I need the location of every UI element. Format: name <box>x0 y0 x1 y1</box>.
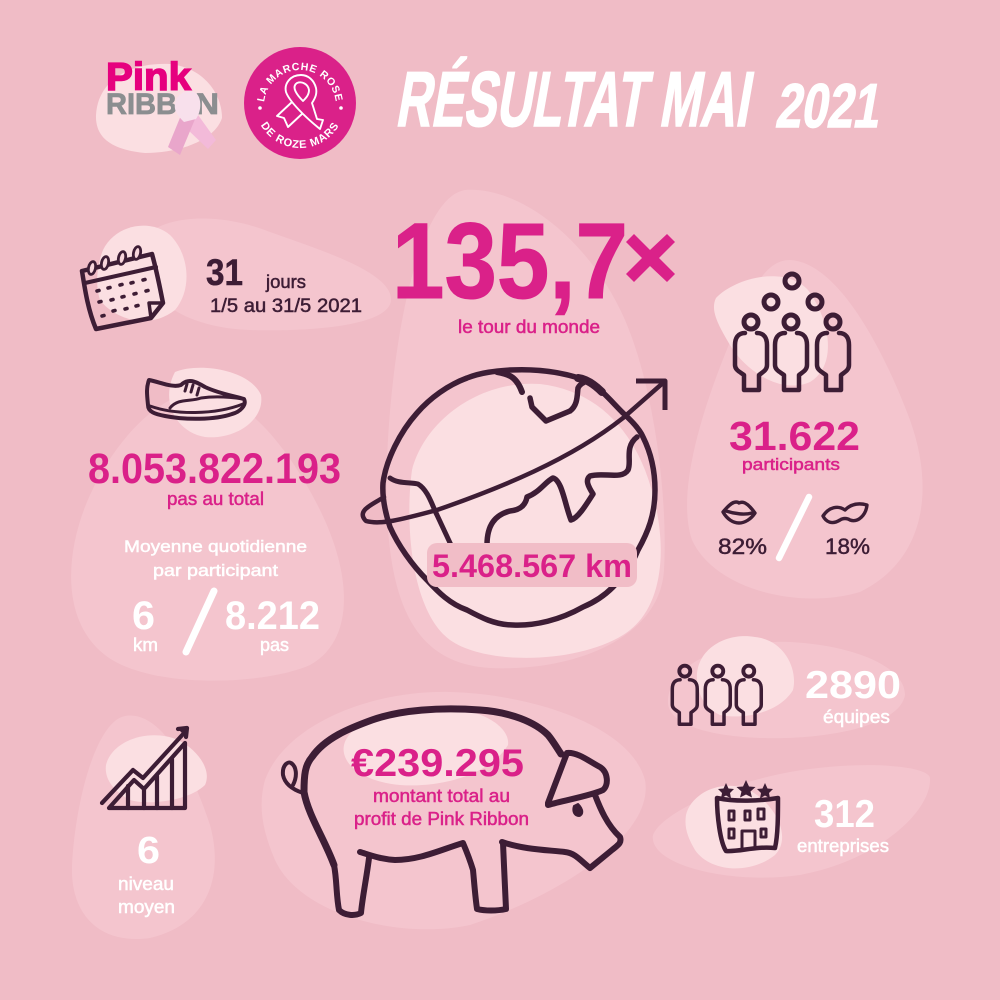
stat: amount raised: profit de Pink Ribbon <box>354 809 529 829</box>
stat: level <box>118 830 175 917</box>
text: 31 jours <box>206 252 362 317</box>
icon: calendar <box>82 246 163 329</box>
background blobs <box>71 64 930 939</box>
logo: La Marche Rose: DE ROZE MARS <box>260 121 338 148</box>
icon: teams <box>672 666 761 724</box>
logo: Pink Ribbon: RIBB <box>106 88 177 121</box>
stat: amount raised <box>351 742 529 829</box>
icon: moustache <box>823 504 867 523</box>
stat: gender split: 18% <box>825 534 870 559</box>
stat: daily average <box>124 537 320 655</box>
stat: teams <box>805 664 901 727</box>
stat: daily average: Moyenne quotidienne <box>124 537 307 556</box>
stat: teams: équipes <box>823 707 890 727</box>
stat: daily average: 8.212 <box>225 594 320 638</box>
stat: daily average: pas <box>260 635 289 655</box>
icon: pig <box>283 709 621 915</box>
stat: amount raised: montant total au <box>373 786 510 806</box>
stat: amount raised: €239.295 <box>351 742 524 785</box>
stat: daily average: 6 <box>132 594 155 638</box>
icon: company building <box>717 780 778 851</box>
text: 31 jours: 31 <box>206 252 243 293</box>
stat: level: moyen <box>118 897 175 917</box>
stat: 135,7x: 135,7 <box>392 200 628 321</box>
icon: shoe <box>147 380 245 419</box>
icon: globe with arrow <box>363 370 665 625</box>
logo: Pink Ribbon: N <box>195 88 219 121</box>
stat: level: niveau <box>118 874 174 894</box>
title: RÉSULTAT MAI <box>392 56 760 143</box>
icon: rising chart <box>102 728 187 808</box>
stat: total steps: pas au total <box>167 489 264 509</box>
stat: daily average: par participant <box>153 561 278 580</box>
logo: La Marche Rose <box>244 47 356 159</box>
stat: companies: entreprises <box>797 836 889 856</box>
icon: lips <box>723 502 755 523</box>
stat: teams: 2890 <box>805 664 901 707</box>
title: 2021 <box>772 71 887 141</box>
text: 31 jours: 1/5 au 31/5 2021 <box>210 296 362 317</box>
stat: gender split <box>718 497 870 559</box>
logo: Pink Ribbon: Pink <box>106 56 191 99</box>
logo: La Marche Rose: LA MARCHE ROSE <box>257 62 343 102</box>
icon: participants <box>735 274 849 390</box>
stat: gender split: 82% <box>718 534 767 559</box>
stat: total steps: 8.053.822.193 <box>88 445 341 493</box>
stat: companies: 312 <box>814 793 875 836</box>
stat: participants: 31.622 <box>729 413 860 459</box>
stat: companies <box>797 793 889 856</box>
text: 31 jours: jours <box>265 272 306 292</box>
label: total distance: 5.468.567 km <box>432 548 632 584</box>
stat: level: 6 <box>137 830 160 872</box>
stat: participants: participants <box>742 455 840 474</box>
logo: Pink Ribbon <box>106 56 219 155</box>
stat: daily average: km <box>133 635 158 655</box>
stat: 135,7x: le tour du monde <box>458 317 600 337</box>
